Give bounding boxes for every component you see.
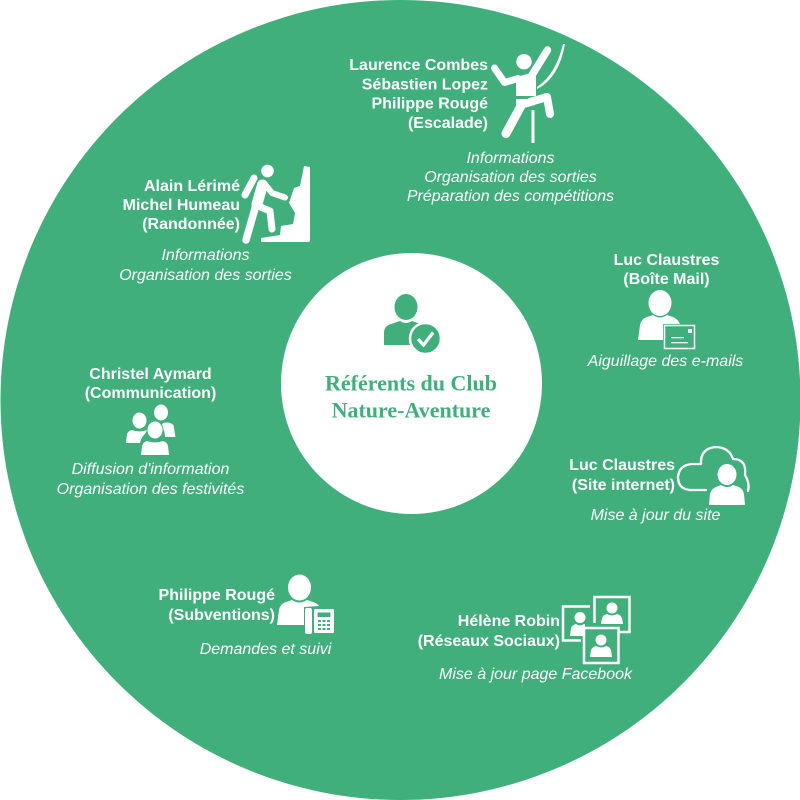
Randonnée description: Informations <box>161 247 250 264</box>
block: Communication <box>57 366 244 498</box>
Réseaux Sociaux names: (Réseaux Sociaux) <box>418 633 560 650</box>
block: Subventions <box>159 574 334 658</box>
block: Boîte Mail <box>587 252 743 370</box>
Site internet names: Luc Claustres <box>569 457 675 474</box>
Randonnée names: Michel Humeau <box>123 197 240 214</box>
Escalade names: Laurence Combes <box>349 57 488 74</box>
Randonnée names: Alain Lérimé <box>144 178 240 195</box>
Escalade names: (Escalade) <box>408 115 488 132</box>
Subventions names: Philippe Rougé <box>159 587 275 604</box>
icon: climber <box>494 44 565 143</box>
Communication description: Organisation des festivités <box>57 481 244 498</box>
icon: person with envelope <box>638 290 694 348</box>
Escalade description: Organisation des sorties <box>424 169 597 186</box>
Subventions description: Demandes et suivi <box>200 641 332 658</box>
Boîte Mail names: Luc Claustres <box>614 252 720 269</box>
block: Randonnée <box>119 165 310 284</box>
Site internet description: Mise à jour du site <box>591 507 721 524</box>
central white circle <box>281 253 542 514</box>
Communication description: Diffusion d'information <box>72 461 230 478</box>
center title: Référents du Club <box>325 370 497 396</box>
Boîte Mail names: (Boîte Mail) <box>623 271 710 288</box>
Escalade description: Préparation des compétitions <box>407 188 614 205</box>
Communication names: (Communication) <box>85 385 216 402</box>
Réseaux Sociaux description: Mise à jour page Facebook <box>439 666 633 683</box>
icon: hiker on a rock <box>245 165 310 242</box>
icon: group of three people <box>126 404 176 455</box>
block: Réseaux Sociaux <box>418 597 633 683</box>
Escalade description: Informations <box>466 150 555 167</box>
Escalade names: Philippe Rougé <box>372 96 488 113</box>
icon: cloud with person <box>678 447 749 505</box>
block: Escalade <box>349 44 614 205</box>
block: Site internet <box>569 447 749 524</box>
Réseaux Sociaux names: Hélène Robin <box>458 613 560 630</box>
Subventions names: (Subventions) <box>168 607 275 624</box>
Boîte Mail description: Aiguillage des e-mails <box>587 353 743 370</box>
icon: three portrait frames <box>563 597 630 663</box>
icon: person with telephone <box>277 574 334 634</box>
Randonnée description: Organisation des sorties <box>119 267 292 284</box>
Escalade names: Sébastien Lopez <box>362 76 488 93</box>
central white circle: Nature-Aventure <box>332 398 491 422</box>
Site internet names: (Site internet) <box>572 477 675 494</box>
icon: person with check mark <box>384 294 441 354</box>
Communication names: Christel Aymard <box>89 366 212 383</box>
Randonnée names: (Randonnée) <box>142 216 240 233</box>
